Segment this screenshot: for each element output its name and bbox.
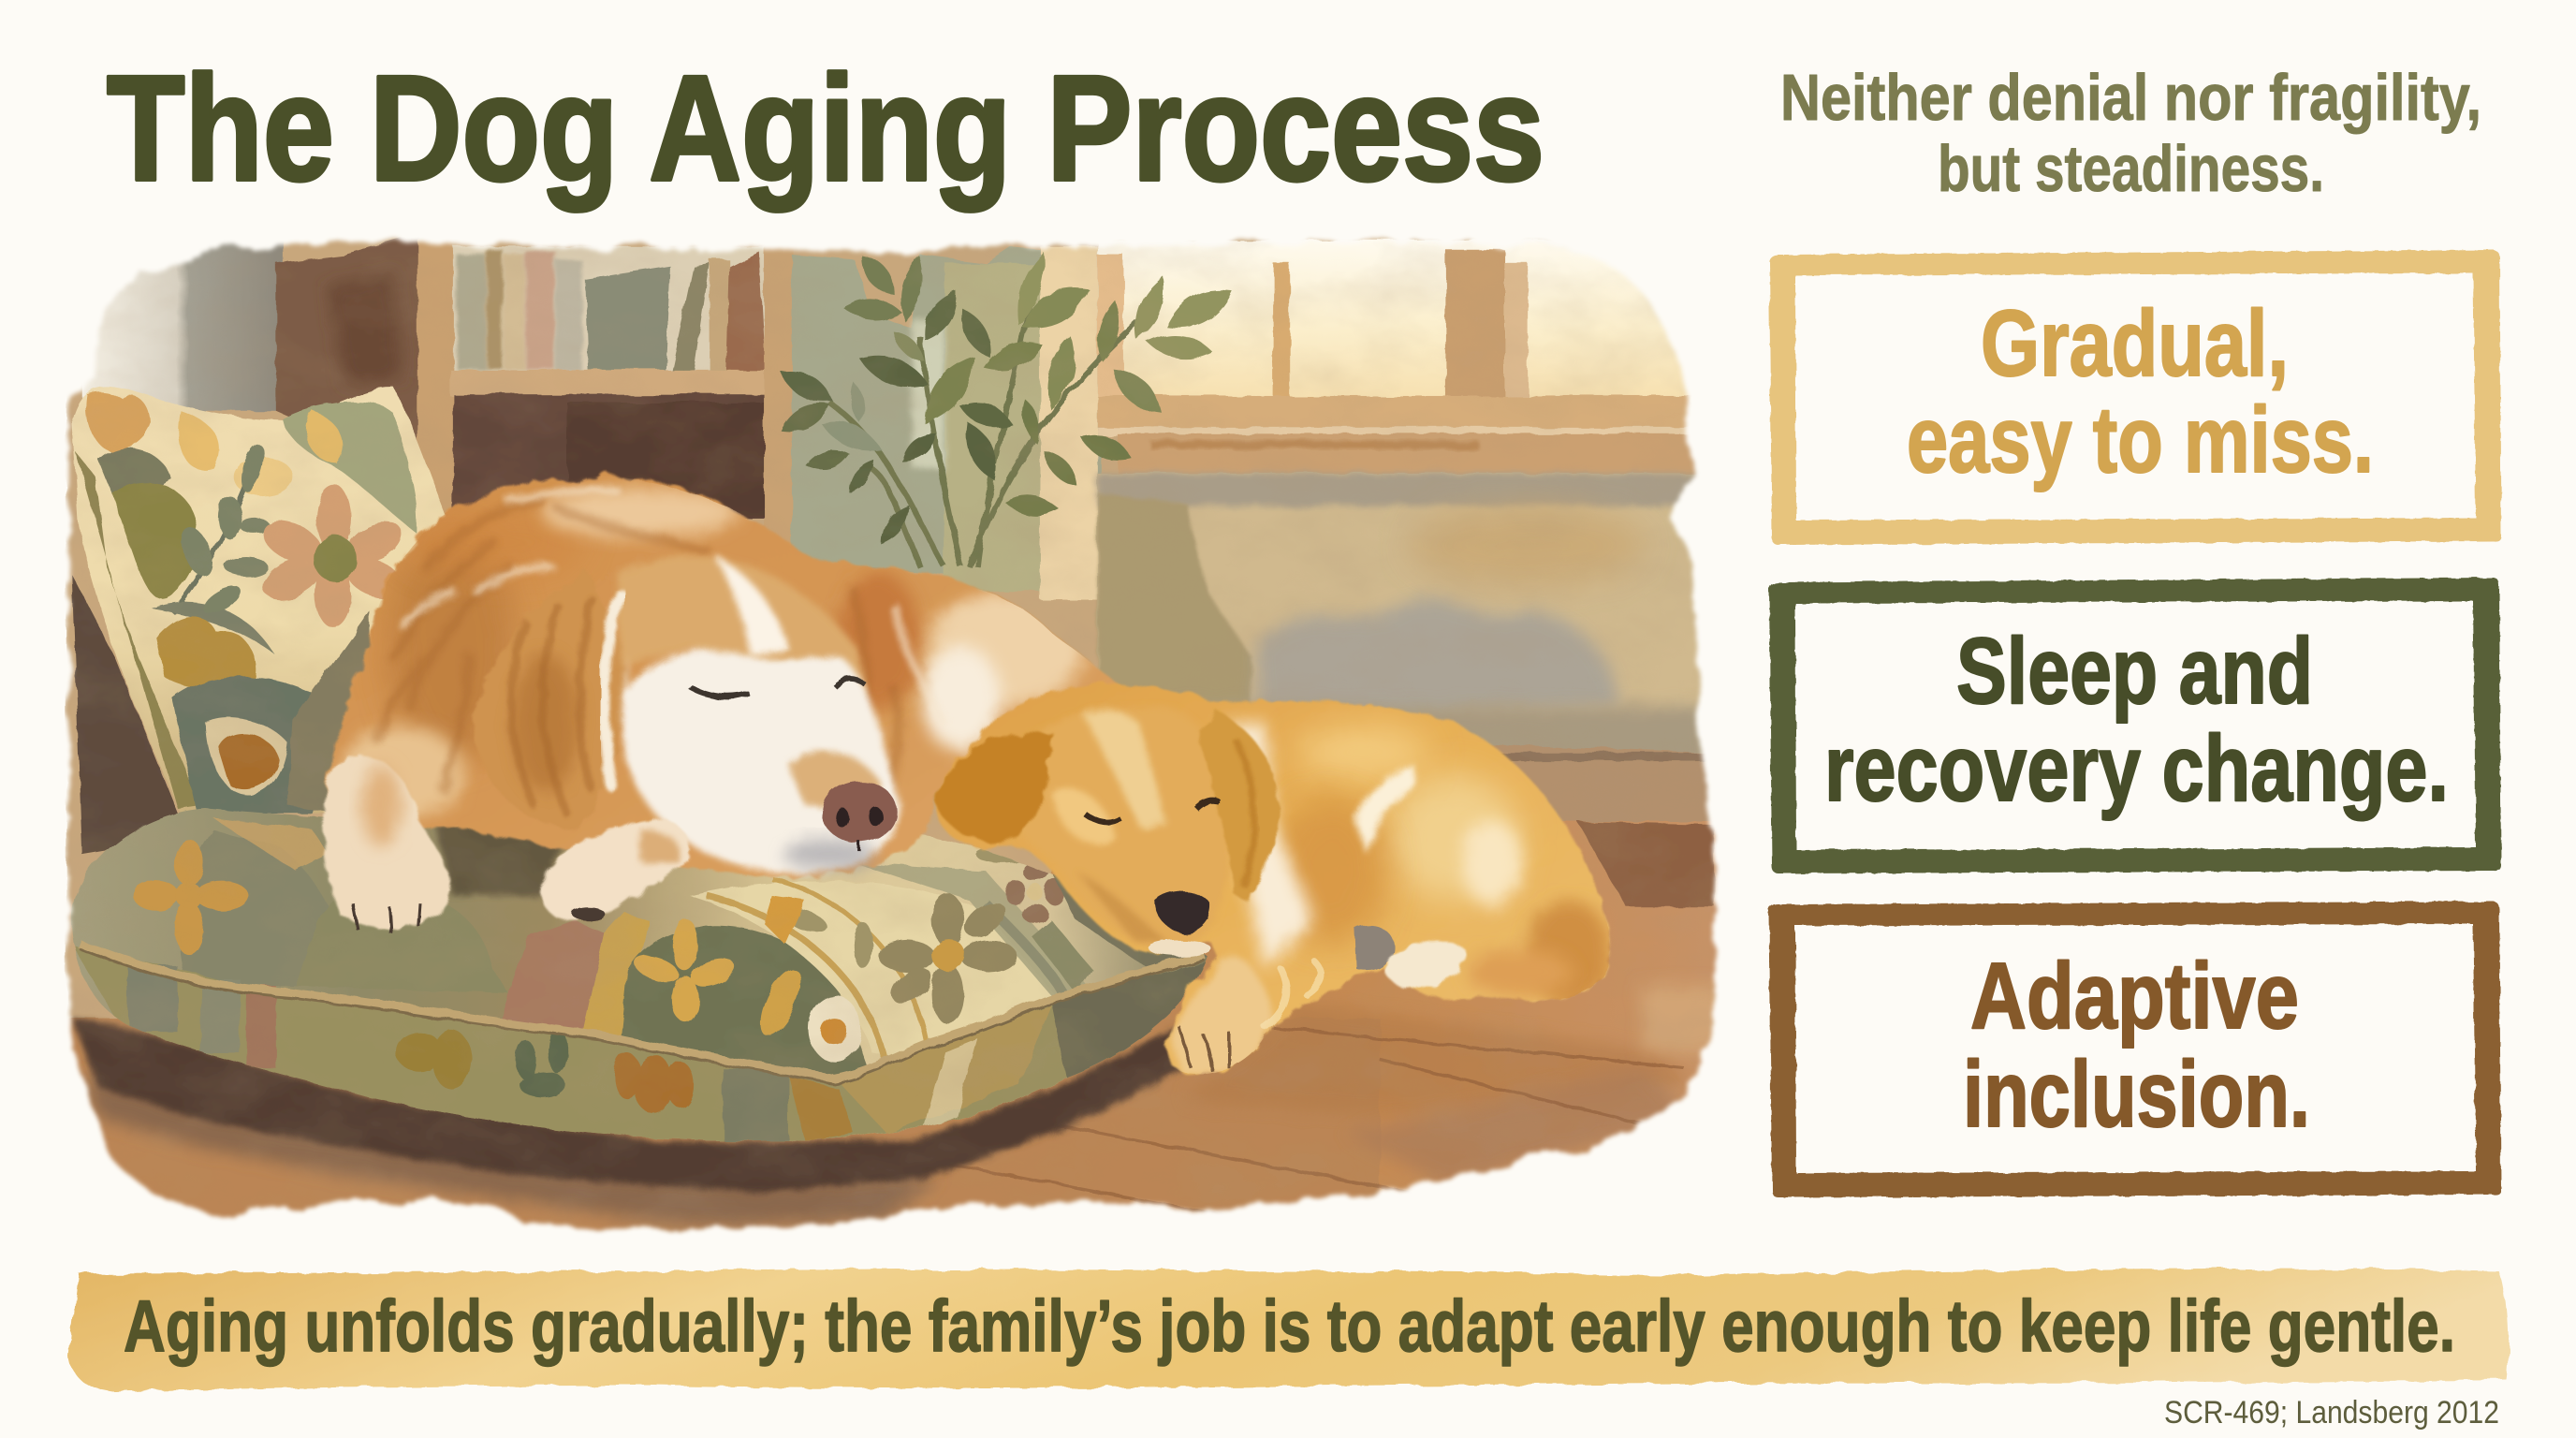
card: adaptive inclusion: inclusion. (1963, 1042, 2310, 1147)
nose bridge (788, 751, 882, 808)
front paw (1179, 1027, 1229, 1071)
brown flower (218, 733, 279, 790)
top-left flower (86, 391, 151, 452)
ochre flower (156, 616, 256, 690)
green wall panel (792, 246, 1101, 592)
dark zone behind paws (435, 822, 566, 895)
takeaway banner (69, 1269, 2509, 1391)
right paw (540, 818, 690, 920)
forehead wash (616, 556, 868, 698)
gold blobs (179, 411, 219, 470)
watercolor illustration: two sleeping golden retrievers (66, 230, 1725, 1249)
window frame and sill (1097, 396, 1692, 427)
right ear (1199, 710, 1278, 899)
grey-green leaf (283, 402, 417, 534)
flowers on cushion (133, 840, 248, 955)
ear edge highlight (604, 594, 621, 785)
card: gradual, easy to miss: Gradual, (1981, 291, 2289, 396)
bottom panel (72, 945, 1208, 1150)
title: The Dog Aging Process (107, 44, 1544, 212)
floral pillow (72, 387, 446, 814)
brown panel (274, 238, 419, 440)
lower wall (1096, 472, 1701, 708)
head (994, 707, 1231, 949)
plant stems (829, 296, 1158, 566)
teal patch (172, 677, 322, 814)
card: gradual, easy to miss: easy to miss. (1907, 388, 2374, 492)
eyes (1084, 814, 1120, 822)
watercolor mottling (66, 230, 1725, 1249)
card: sleep and recovery change: recovery change. (1824, 716, 2449, 821)
card: adaptive inclusion (1769, 902, 2501, 1197)
grey wall wash (82, 230, 283, 411)
bookcase (417, 238, 794, 559)
fur strokes (378, 501, 898, 805)
nose (1155, 891, 1211, 933)
source citation: SCR-469; Landsberg 2012 (2164, 1395, 2499, 1431)
tagline: but steadiness. (1938, 132, 2324, 205)
soft fade under shadow (82, 1077, 936, 1225)
back paw (1387, 941, 1465, 990)
left foreleg and paw (323, 756, 449, 929)
paw pads (1355, 925, 1394, 971)
left ear (936, 731, 1051, 842)
plant leaves (781, 252, 1232, 544)
left dark armchair shadow (72, 575, 178, 855)
base wash (64, 235, 1712, 1020)
wall stains (1257, 597, 1618, 723)
young dog (936, 684, 1612, 1077)
muzzle shadow (783, 838, 875, 871)
top-left band (213, 818, 329, 871)
grey-brown wedge (287, 611, 374, 814)
sprig (172, 455, 256, 613)
olive blob (111, 482, 198, 599)
floor (1051, 820, 1718, 1193)
large peach flower (256, 485, 409, 627)
card: adaptive inclusion: Adaptive (1970, 944, 2299, 1049)
window (1097, 240, 1708, 404)
cushion piping (79, 943, 1204, 1078)
tagline (1780, 61, 2481, 205)
shadow beneath cushion (72, 1010, 1262, 1193)
baseboard (1492, 744, 1709, 824)
patterned cushion (72, 808, 1208, 1150)
nose (822, 781, 897, 843)
eyes (690, 687, 749, 697)
pillow side band (76, 452, 200, 808)
card: sleep and recovery change: Sleep and (1956, 619, 2313, 724)
blaze (714, 555, 788, 657)
face (622, 651, 900, 874)
old dog (323, 473, 1142, 933)
card: gradual, easy to miss (1769, 250, 2501, 545)
card: sleep and recovery change (1769, 578, 2501, 873)
ear (473, 572, 627, 827)
